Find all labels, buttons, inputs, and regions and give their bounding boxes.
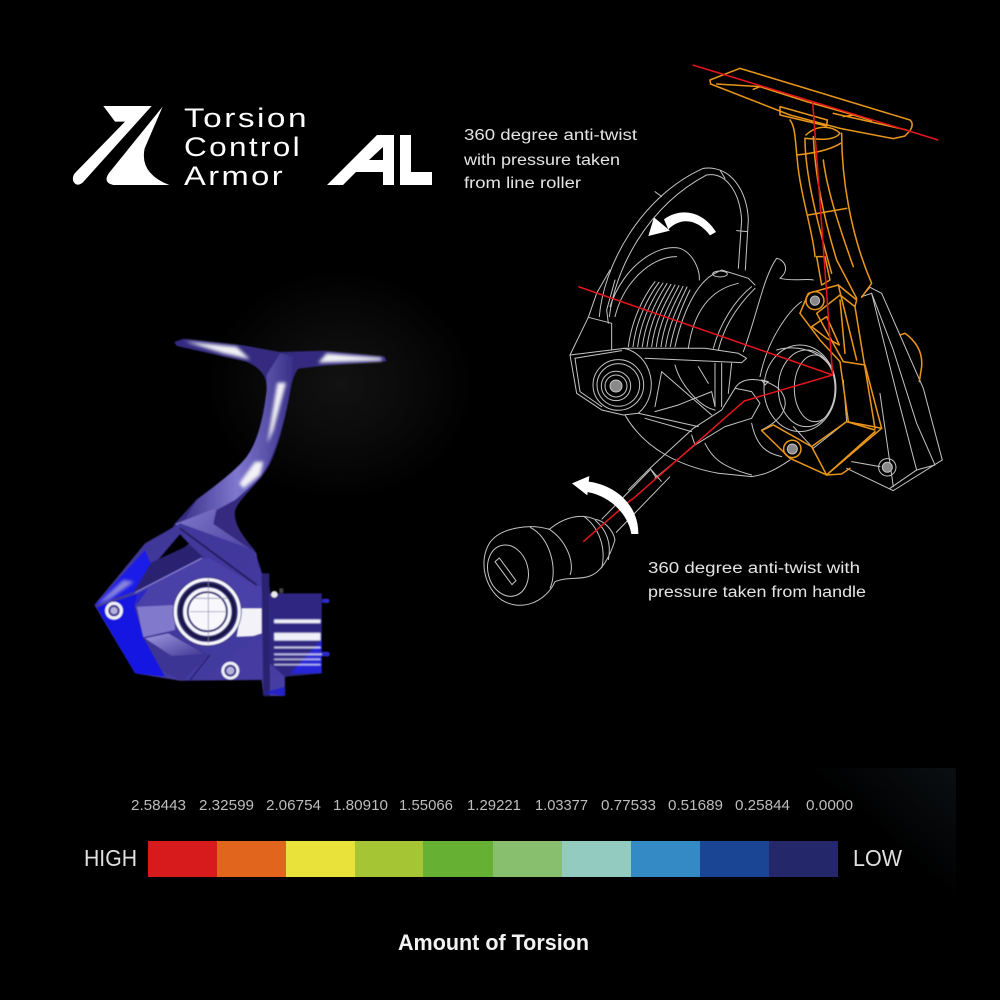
orange frame (710, 68, 922, 475)
scale values: 1.03377 (535, 797, 588, 814)
scale values: 2.06754 (266, 797, 321, 814)
rotor cup (675, 270, 755, 347)
callout: line roller anti-twist: 360 degree anti-twist (464, 127, 638, 144)
logo text: Torsion (184, 103, 309, 133)
stem (790, 120, 815, 257)
scale values: 0.77533 (601, 797, 656, 814)
bearing ring (173, 577, 242, 646)
strut edge (180, 528, 257, 585)
rotor housing (262, 573, 270, 696)
rotor rear disc (625, 415, 790, 477)
logo: AL badge (327, 135, 432, 185)
high-blue zones (95, 550, 151, 605)
bright centre bar (237, 608, 262, 637)
lavender plate (137, 605, 175, 637)
frame screws (105, 602, 123, 620)
logo text: Armor (184, 161, 285, 191)
scale values: 0.51689 (668, 797, 723, 814)
bail arm roller block (570, 317, 612, 355)
lower strut (175, 508, 258, 585)
handle knob (482, 468, 670, 605)
foot (710, 68, 912, 139)
logo text (184, 103, 309, 191)
rear cover (900, 333, 922, 382)
frame body (800, 285, 882, 428)
colour scale bar (148, 841, 838, 877)
side plate (847, 287, 942, 491)
scale values: 1.29221 (467, 797, 521, 814)
reel frame arm (157, 339, 387, 574)
scale values: 1.55066 (399, 797, 453, 814)
foot highlights (185, 341, 382, 488)
scale values: 2.32599 (199, 797, 254, 814)
callout: handle anti-twist: 360 degree anti-twist with (648, 560, 860, 577)
chart caption: Amount of Torsion (398, 930, 589, 955)
callout: handle anti-twist: pressure taken from handle (648, 584, 866, 601)
label: low: LOW (853, 845, 902, 871)
arrow: handle rotation (572, 476, 638, 534)
handle red axis (583, 499, 632, 542)
handle arm (628, 380, 785, 490)
lower frame (762, 422, 882, 475)
scale values: 2.58443 (131, 797, 186, 814)
scale values: 0.25844 (735, 797, 790, 814)
callout: handle anti-twist (648, 560, 866, 601)
window (155, 534, 189, 563)
white outline parts (570, 168, 942, 491)
label: high: HIGH (84, 845, 137, 871)
callout: line roller anti-twist (463, 127, 638, 192)
arrow: bail rotation (648, 212, 716, 236)
spool (610, 248, 699, 307)
torsion axis lines (578, 65, 938, 500)
body (94, 523, 329, 696)
callout: line roller anti-twist: with pressure taken (463, 152, 620, 169)
upper dark panel (133, 545, 203, 593)
scale values (131, 797, 853, 814)
arm highlight band (180, 353, 293, 527)
bail wire (599, 168, 748, 317)
scale values: 1.80910 (333, 797, 388, 814)
logo: torsion control armor mark (73, 106, 169, 185)
blue torsion-simulated reel (94, 339, 387, 696)
under-frame struts (655, 372, 715, 415)
callout: line roller anti-twist: from line roller (464, 175, 581, 192)
scale values: 0.0000 (806, 797, 853, 814)
line drawing of reel (570, 65, 942, 500)
logo text: Control (184, 132, 302, 162)
